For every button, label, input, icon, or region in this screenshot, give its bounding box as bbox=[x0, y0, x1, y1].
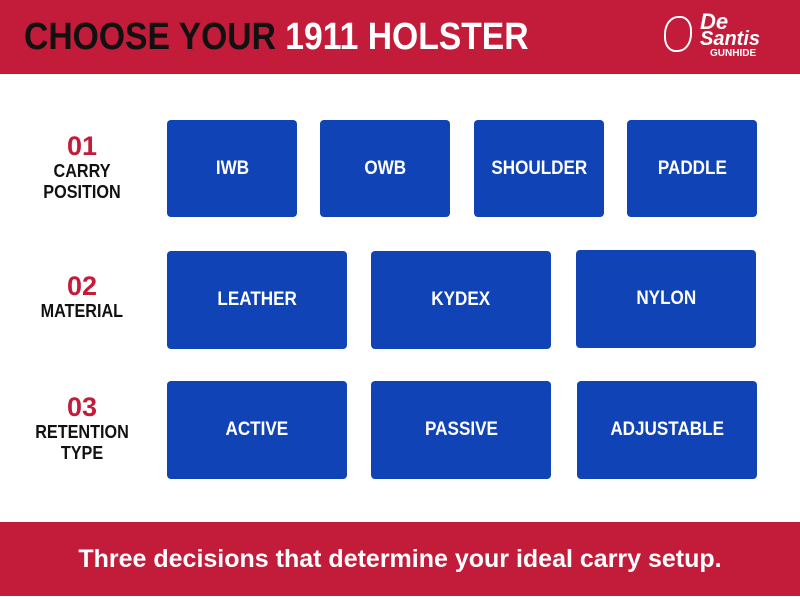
logo bbox=[664, 9, 760, 59]
row label 01: 01 bbox=[67, 131, 97, 161]
PASSIVE bbox=[371, 381, 551, 479]
LEATHER bbox=[167, 251, 347, 349]
KYDEX bbox=[371, 251, 551, 349]
title: CHOOSE YOUR 1911 HOLSTER bbox=[24, 16, 529, 58]
row label 02 bbox=[41, 271, 123, 321]
row label 01: POSITION bbox=[43, 182, 121, 202]
ADJUSTABLE bbox=[577, 381, 757, 479]
ACTIVE: ACTIVE bbox=[226, 419, 288, 440]
logo: Santis bbox=[700, 28, 760, 50]
row label 01 bbox=[43, 131, 121, 202]
IWB bbox=[167, 120, 297, 217]
KYDEX: KYDEX bbox=[432, 289, 490, 310]
PADDLE: PADDLE bbox=[657, 158, 727, 178]
PASSIVE: PASSIVE bbox=[425, 419, 497, 440]
OWB bbox=[320, 120, 450, 217]
row label 03: RETENTION bbox=[35, 422, 129, 442]
row label 03 bbox=[35, 392, 129, 463]
header bar bbox=[0, 0, 800, 74]
footer bar bbox=[0, 522, 800, 596]
ACTIVE bbox=[167, 381, 347, 479]
SHOULDER: SHOULDER bbox=[491, 158, 587, 178]
row label 03: TYPE bbox=[61, 443, 103, 463]
logo: GUNHIDE bbox=[710, 48, 756, 59]
row label 02: MATERIAL bbox=[41, 301, 123, 321]
row label 02: 02 bbox=[67, 271, 97, 301]
PADDLE bbox=[627, 120, 757, 217]
NYLON: NYLON bbox=[636, 288, 696, 309]
LEATHER: LEATHER bbox=[217, 289, 297, 310]
logo: De bbox=[700, 9, 728, 34]
ADJUSTABLE: ADJUSTABLE bbox=[610, 419, 724, 440]
IWB: IWB bbox=[215, 158, 249, 178]
OWB: OWB bbox=[364, 158, 406, 178]
SHOULDER bbox=[474, 120, 604, 217]
row label 03: 03 bbox=[67, 392, 97, 422]
NYLON bbox=[576, 250, 756, 348]
row label 01: CARRY bbox=[53, 161, 110, 181]
footer bar: Three decisions that determine your ideal carry setup. bbox=[78, 544, 722, 572]
